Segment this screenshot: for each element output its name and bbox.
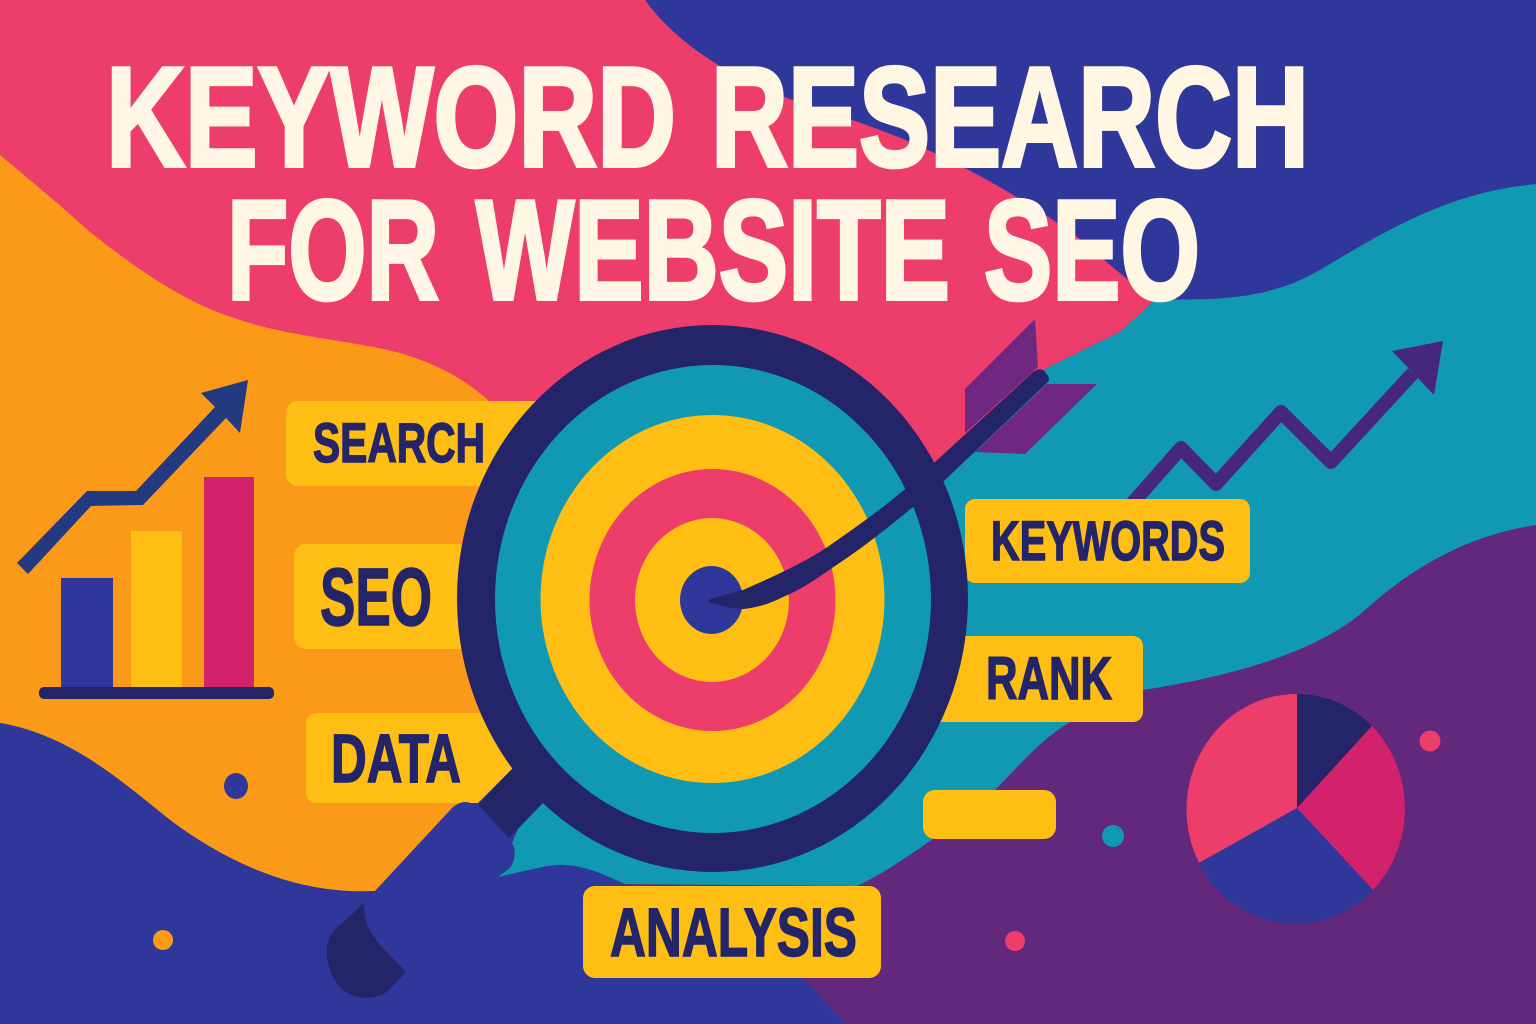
yellow ring: [540, 415, 884, 783]
rising arrow: [17, 380, 248, 574]
label: search: [286, 401, 546, 486]
pink ring: [590, 469, 836, 731]
upper fletching: [965, 319, 1038, 433]
yellow inner ring: [635, 518, 789, 682]
title line 2: [227, 171, 1200, 330]
lower fletching: [975, 384, 1097, 454]
bar navy: [61, 578, 113, 688]
bar magenta: [204, 477, 254, 688]
glass rim: [457, 325, 968, 872]
title line 2: SEO: [984, 171, 1200, 330]
label: analysis: [583, 886, 881, 978]
label: rank: [900, 636, 1143, 722]
title line 1: KEYWORD: [106, 38, 676, 197]
bar chart icon: [17, 380, 274, 699]
label: blank tag: [923, 790, 1056, 839]
label: analysis: ANALYSIS: [610, 894, 857, 971]
label: rank: RANK: [986, 645, 1112, 712]
background: teal wave: [498, 184, 1536, 1024]
arrow in target: [709, 319, 1097, 609]
handle body: [364, 802, 515, 950]
label: keywords: KEYWORDS: [991, 509, 1225, 572]
decorative dots: [153, 730, 1440, 951]
bullseye: [680, 566, 743, 634]
zigzag line: [1130, 373, 1413, 506]
title line 1: RESEARCH: [711, 38, 1309, 197]
shaft: [709, 369, 1049, 609]
background: pink wave: [0, 0, 1155, 620]
title line 1: [106, 38, 1309, 197]
background: blue lower-left wave: [0, 723, 846, 1024]
label: search: SEARCH: [313, 411, 485, 474]
background: orange wave: [0, 155, 600, 891]
title line 2: FOR: [227, 171, 439, 330]
magnifying glass handle: [327, 768, 543, 998]
handle end cap: [327, 903, 406, 998]
pie chart: [1187, 694, 1405, 924]
title: [106, 38, 1309, 330]
teal ring: [495, 365, 931, 833]
title line 2: WEBSITE: [476, 171, 950, 330]
target in magnifying glass: [457, 325, 968, 872]
baseline: [39, 687, 274, 699]
handle connector: [478, 768, 543, 838]
zigzag arrow: [1130, 341, 1443, 506]
label: seo: SEO: [320, 552, 432, 643]
zigzag head: [1392, 341, 1443, 395]
background: purple wave: [620, 525, 1536, 1024]
bar yellow: [131, 531, 182, 688]
label: data: DATA: [331, 720, 461, 797]
label: keywords: [965, 499, 1250, 583]
